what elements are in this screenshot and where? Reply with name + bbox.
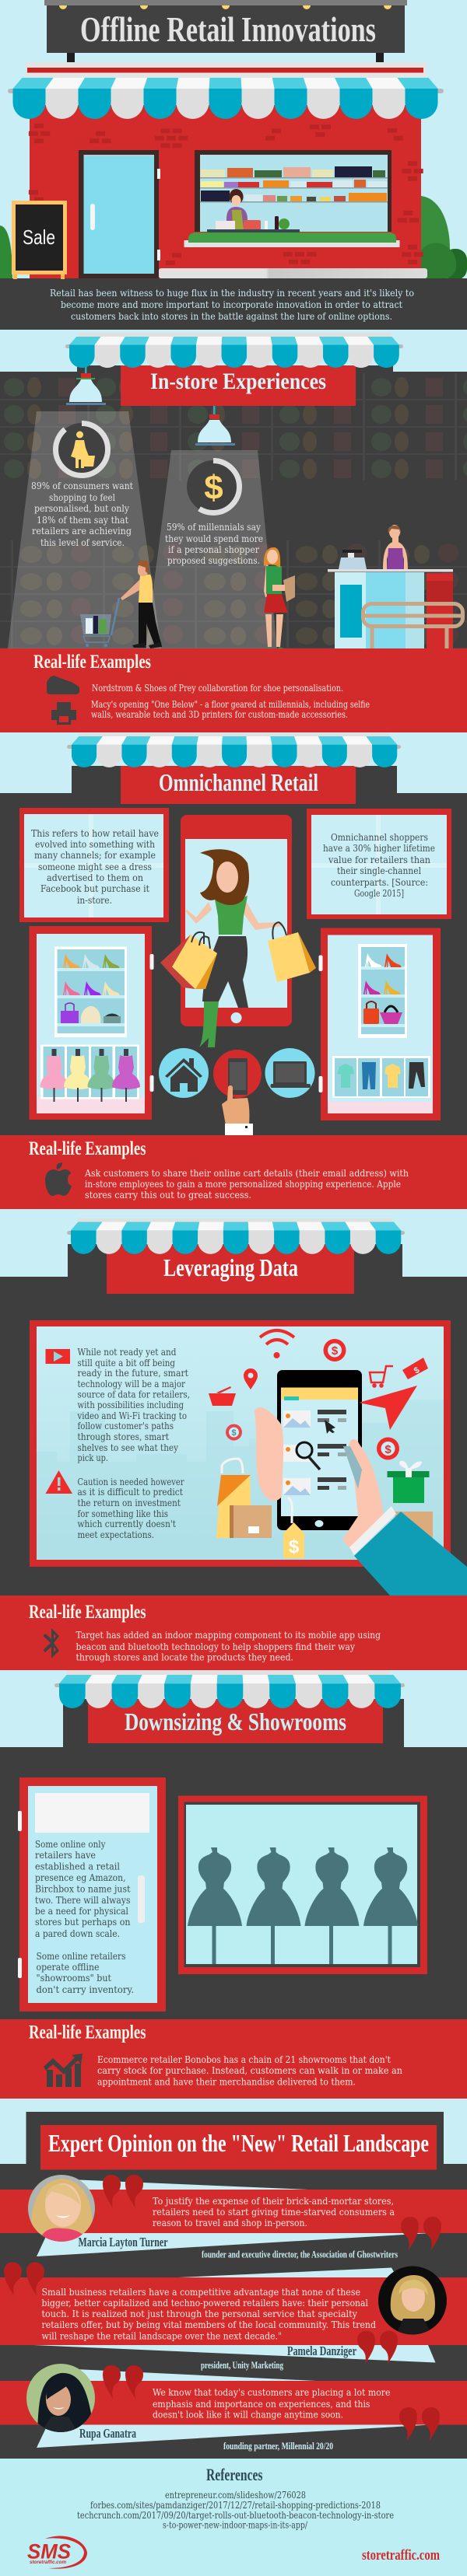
icon: phone circle with pointing hand — [213, 1050, 262, 1135]
lamp 2 — [195, 406, 235, 446]
text panel: definition: This refers to how retail have — [31, 827, 159, 839]
quote text — [153, 2386, 391, 2420]
icon: dollar: $ — [204, 469, 223, 507]
text block: smart technology: shelves to see what they — [78, 1442, 179, 1453]
example text: Ask customers to share their online cart details (their email address) with — [84, 1167, 409, 1179]
shopper woman — [264, 547, 295, 650]
icon: shoe — [47, 676, 79, 694]
references heading: References — [206, 2465, 263, 2484]
icon: cart — [370, 1366, 393, 1387]
text block: smart technology: video and Wi-Fi tracking to — [77, 1410, 187, 1421]
icon: coin: $ — [231, 1428, 237, 1438]
text block: smart technology: technology will be a major — [78, 1378, 185, 1389]
example text: Ecommerce retailer Bonobos has a chain of 21 showrooms that don't — [97, 2053, 391, 2065]
quote mark open — [103, 2175, 143, 2208]
icon: warning — [45, 1470, 72, 1494]
text panel: definition: someone might see a dress — [38, 861, 152, 872]
icon: bluetooth — [44, 1628, 59, 1658]
quote mark close — [401, 2217, 441, 2250]
quote text: We know that today's customers are placing a lot more — [153, 2386, 391, 2398]
example text: walls, wearable tech and 3D printers for custom-made accessories. — [91, 708, 348, 720]
icon: coin — [377, 1437, 399, 1460]
text panel: lifetime value: value for retailers than — [328, 854, 430, 865]
example text: through stores and locate the products they need. — [76, 1652, 293, 1662]
title: Offline Retail Innovations — [80, 9, 376, 49]
stat text: 89%: this level of service. — [40, 537, 125, 548]
text panel: definition: advertised to them on — [47, 872, 143, 883]
stat ring: 89% — [55, 423, 108, 476]
awning — [67, 733, 401, 767]
store interior with shelves — [0, 365, 467, 648]
quote text: doesn't look like it will change anytime soon. — [153, 2409, 343, 2420]
awning — [54, 1670, 405, 1708]
light cones — [8, 411, 277, 648]
text block: online retailers — [35, 1838, 131, 1939]
example text — [76, 1629, 381, 1662]
shoe shelf — [54, 947, 127, 1037]
stat text: 89% — [31, 480, 133, 548]
icon: coin: $ — [384, 1443, 392, 1456]
text panel: lifetime value — [307, 809, 451, 919]
example text — [91, 698, 370, 720]
attribution — [201, 2344, 356, 2371]
example text: in-store employees to gain a more personalized shopping experience. Apple — [85, 1178, 401, 1190]
icon: gift — [388, 1461, 430, 1503]
lamp 1 — [66, 367, 106, 405]
quote text: will reshape the retail landscape over the next decade." — [42, 2330, 282, 2342]
example text: Nordstrom & Shoes of Prey collaboration for shoe personalisation. — [92, 682, 343, 694]
text block: smart technology: follow customer's paths — [78, 1420, 174, 1431]
icon: coin: $ — [332, 1344, 339, 1358]
heading banner — [40, 2125, 437, 2169]
ground band — [0, 278, 467, 330]
portrait — [28, 2175, 95, 2242]
heading: Leveraging Data — [163, 1253, 298, 1281]
quote text — [153, 2195, 395, 2228]
text block: showrooms: operate offline — [36, 1961, 100, 1973]
awning — [65, 333, 403, 368]
text panel: lifetime value: have a 30% higher lifetime — [323, 842, 435, 854]
text panel: lifetime value: Google 2015] — [354, 887, 404, 899]
clothes rack — [332, 1056, 430, 1098]
sale board — [12, 201, 67, 279]
references list: entrepreneur.com/slideshow/276028 — [165, 2489, 306, 2501]
quote text: touch. It is realized not just through the personal service that specialty — [42, 2308, 358, 2319]
showroom window with mannequins — [178, 1796, 427, 1974]
rail — [363, 603, 463, 648]
quote 3: Rupa Ganatra — [0, 2364, 467, 2452]
shopper with cart — [80, 561, 162, 648]
heading: Downsizing & Showrooms — [125, 1707, 346, 1735]
quote mark close — [357, 2331, 398, 2364]
icon: hanging price tag: $ — [289, 1536, 300, 1557]
example text: Target has added an indoor mapping component to its mobile app using — [76, 1629, 381, 1641]
icon: paper plane — [359, 1386, 417, 1430]
website: storetraffic.com — [362, 2547, 440, 2564]
heading: Real-life Examples — [29, 2022, 146, 2043]
attribution — [79, 2426, 333, 2452]
dark backdrop — [0, 2112, 467, 2459]
store backdrop — [0, 766, 467, 1135]
quote text: retailers need to start giving time-starved consumers a — [153, 2206, 395, 2218]
text block: caution — [78, 1476, 184, 1540]
attribution: Pamela Danziger — [287, 2344, 356, 2358]
text block: online retailers: established a retail — [35, 1860, 120, 1872]
icon: price tag — [402, 1358, 428, 1379]
stat text: 59%: they would spend more — [165, 533, 263, 544]
text block: caution: Caution is needed however — [78, 1476, 184, 1487]
portrait — [26, 2364, 95, 2432]
stat text: 89%: retailers are achieving — [32, 525, 132, 537]
references list: s-to-power-new-indoor-maps-in-its-app/ — [163, 2519, 308, 2530]
door — [79, 150, 160, 278]
text block: caution: as it is difficult to predict — [78, 1486, 183, 1498]
real-life band — [0, 648, 467, 732]
quote mark open — [4, 2263, 44, 2295]
icon: house circle — [159, 1048, 209, 1098]
panel: leveraging data — [0, 1218, 467, 1670]
text block: online retailers: retailers have — [35, 1849, 96, 1861]
icon: apple — [45, 1162, 72, 1196]
text block: smart technology: While not ready yet and — [78, 1346, 176, 1358]
icon: woman with shopping bag — [71, 431, 95, 468]
text block: online retailers: be a need for physical — [35, 1905, 128, 1917]
icon: growth chart — [44, 2053, 83, 2087]
real-life band — [0, 1596, 467, 1670]
text block: showrooms: "showrooms" but — [36, 1972, 111, 1984]
cashier — [207, 189, 300, 232]
text panel: definition: in-store. — [77, 894, 112, 906]
text block: online retailers: presence eg Amazon, — [35, 1872, 126, 1883]
references list — [77, 2489, 394, 2530]
example text: beacon and bluetooth technology to help shoppers find their way — [76, 1641, 356, 1652]
stat ring: 59% — [187, 460, 240, 513]
logo: SMS — [27, 2536, 87, 2569]
text block: smart technology: still quite a bit off being — [78, 1357, 175, 1368]
icon: coin — [324, 1339, 346, 1361]
heading: Real-life Examples — [33, 652, 151, 673]
quote text: retailers offer, but by being vital members of the local community. This trend — [42, 2319, 376, 2330]
text block: online retailers: stores but perhaps on — [35, 1916, 131, 1928]
text block: caution: the return on investment — [78, 1497, 181, 1508]
quote text: emphasis and importance on experiences, and this — [153, 2398, 370, 2410]
store panel: shoes and dresses — [30, 926, 154, 1120]
text block: smart technology: with possibilities including — [78, 1399, 184, 1410]
icon: map pin — [244, 1368, 258, 1389]
icon: basket — [209, 1386, 236, 1406]
stat text: 59%: proposed suggestions. — [167, 554, 260, 566]
text block: caution: for something like this — [78, 1508, 168, 1519]
store backdrop — [0, 1699, 467, 2019]
text panel: lifetime value: counterparts. [Source: — [331, 876, 428, 888]
panel: in-store experiences — [0, 333, 467, 732]
tablet device — [181, 815, 292, 1026]
quote mark close — [399, 2407, 440, 2441]
shop window with shelves and cashier — [195, 150, 392, 232]
footer — [0, 2459, 467, 2576]
panel: hero storefront — [0, 0, 467, 330]
quote text — [42, 2286, 376, 2342]
awning — [67, 1218, 405, 1254]
text block: smart technology: ready in the future, smart — [78, 1367, 188, 1379]
heading: Real-life Examples — [29, 1602, 146, 1623]
text block: online retailers: Birchbox to name just — [35, 1883, 131, 1894]
quote text: To justify the expense of their brick-and-mortar stores, — [153, 2195, 394, 2207]
stat text: 89%: 89% of consumers want — [31, 480, 133, 491]
dress rack — [40, 1045, 140, 1102]
text panel: lifetime value: their single-channel — [337, 865, 421, 876]
panel: omnichannel retail — [0, 733, 467, 1209]
icon: printer — [51, 702, 76, 725]
tablet with listing — [277, 1370, 362, 1530]
icon: shopping bag and box — [216, 1459, 433, 1547]
text panel: definition: many channels; for example — [34, 849, 156, 861]
example text — [84, 1167, 409, 1201]
stat text: 59%: if a personal shopper — [168, 544, 259, 555]
text block: caution: which currently doesn't — [78, 1518, 176, 1529]
attribution: Rupa Ganatra — [79, 2426, 136, 2441]
sleeve and cuff — [349, 1506, 467, 1596]
quote text: bigger, better capitalized and techno-powered retailers have: their personal — [42, 2297, 368, 2309]
logo: SMS: SMS — [27, 2539, 71, 2563]
text panel: definition: evolved into something with — [35, 838, 155, 850]
counter and cashier — [328, 525, 463, 648]
quote 2: Pamela Danziger — [0, 2263, 467, 2371]
text block: showrooms — [36, 1950, 134, 1995]
references list: forbes.com/sites/pamdanziger/2017/12/27/retail-shopping-predictions-2018 — [90, 2499, 381, 2511]
shoe shelf — [358, 944, 407, 1038]
quote text: Small business retailers have a competitive advantage that none of these — [42, 2286, 360, 2298]
real-life band — [0, 2019, 467, 2099]
text block: smart technology — [77, 1346, 190, 1463]
heading banner: In-store Experiences — [150, 369, 326, 394]
bushes — [0, 196, 467, 281]
cornice — [26, 62, 427, 78]
text block: caution: meet expectations. — [78, 1529, 154, 1540]
entrance step — [159, 268, 427, 278]
window sill — [184, 232, 400, 247]
icon: video — [45, 1349, 70, 1364]
quote text: reason to travel and shop in-person. — [153, 2217, 307, 2228]
panel: downsizing and showrooms — [0, 1670, 467, 2099]
icon: hanging price tag — [283, 1498, 304, 1558]
right shopping bag — [268, 922, 316, 982]
intro text — [50, 287, 414, 322]
attribution: Marcia Layton Turner — [78, 2235, 168, 2249]
text block: showrooms: Some online retailers — [36, 1950, 126, 1962]
data panel — [30, 1320, 467, 1596]
panel: expert opinion — [0, 2112, 467, 2459]
icon: coin — [226, 1424, 242, 1440]
store backdrop — [0, 1244, 467, 1596]
text block: smart technology: source of data for retailers, — [78, 1389, 190, 1400]
intro text: become more and more important to incorporate innovation in order to attract — [61, 299, 402, 310]
heading: Real-life Examples — [29, 1138, 146, 1159]
attribution: founder and executive director, the Association of Ghostwriters — [202, 2249, 398, 2260]
example text — [97, 2053, 402, 2087]
text block: online retailers: a pared down scale. — [35, 1928, 120, 1939]
stat text: 89%: shopping to feel — [49, 491, 115, 503]
text block: smart technology: pick up. — [78, 1452, 108, 1463]
heading banner — [69, 337, 399, 406]
portrait — [378, 2266, 447, 2336]
attribution — [78, 2235, 398, 2260]
text panel: definition: Facebook but purchase it — [40, 883, 149, 894]
quote 1: Marcia Layton Turner — [0, 2175, 467, 2260]
example text: carry stock for purchase. Instead, customers can walk in or make an — [97, 2064, 402, 2076]
sign board — [44, 0, 407, 63]
cityscape — [37, 1400, 444, 1560]
store panel: shoes and clothes — [319, 928, 441, 1120]
text block: smart technology: through stores, smart — [78, 1431, 169, 1442]
stat text: 59%: 59% of millennials say — [167, 521, 262, 533]
icon: wifi — [260, 1330, 294, 1358]
example text: stores carry this out to great success. — [85, 1189, 251, 1201]
real-life band — [0, 1135, 467, 1209]
store wall with bricks — [29, 105, 423, 278]
intro text: customers back into stores in the battle against the lure of online options. — [71, 310, 392, 322]
text panel: definition — [19, 808, 169, 922]
left shopping bags — [160, 932, 217, 989]
example text: appointment and have their merchandise delivered to them. — [97, 2076, 356, 2087]
text panel: lifetime value: Omnichannel shoppers — [331, 831, 428, 843]
attribution: founding partner, Millennial 20/20 — [223, 2440, 333, 2452]
intro text: Retail has been witness to huge flux in the industry in recent years and it's likely to — [50, 287, 414, 299]
sale board: Sale — [23, 225, 55, 249]
heading: Omnichannel Retail — [159, 768, 318, 796]
door panel — [18, 1777, 166, 2012]
icon: price tag: $ — [413, 1365, 421, 1376]
quote mark open — [103, 2365, 143, 2399]
text block: online retailers: two. There will always — [35, 1894, 131, 1906]
text block: online retailers: Some online only — [35, 1838, 106, 1850]
icon: laptop circle — [265, 1048, 314, 1098]
text block: showrooms: don't carry inventory. — [36, 1984, 134, 1995]
stat text: 89%: 18% of them say that — [37, 514, 128, 526]
hands holding tablet — [255, 1407, 384, 1549]
logo: SMS: storetraffic.com — [30, 2560, 67, 2565]
woman with shopping bags — [160, 849, 316, 1047]
stat text: 59% — [165, 521, 263, 566]
awning — [8, 78, 444, 119]
attribution: president, Unity Marketing — [201, 2359, 283, 2371]
stat text: 89%: personalised, but only — [34, 502, 130, 514]
example text: Macy's opening "One Below" - a floor geared at millennials, including selfie — [91, 698, 370, 710]
